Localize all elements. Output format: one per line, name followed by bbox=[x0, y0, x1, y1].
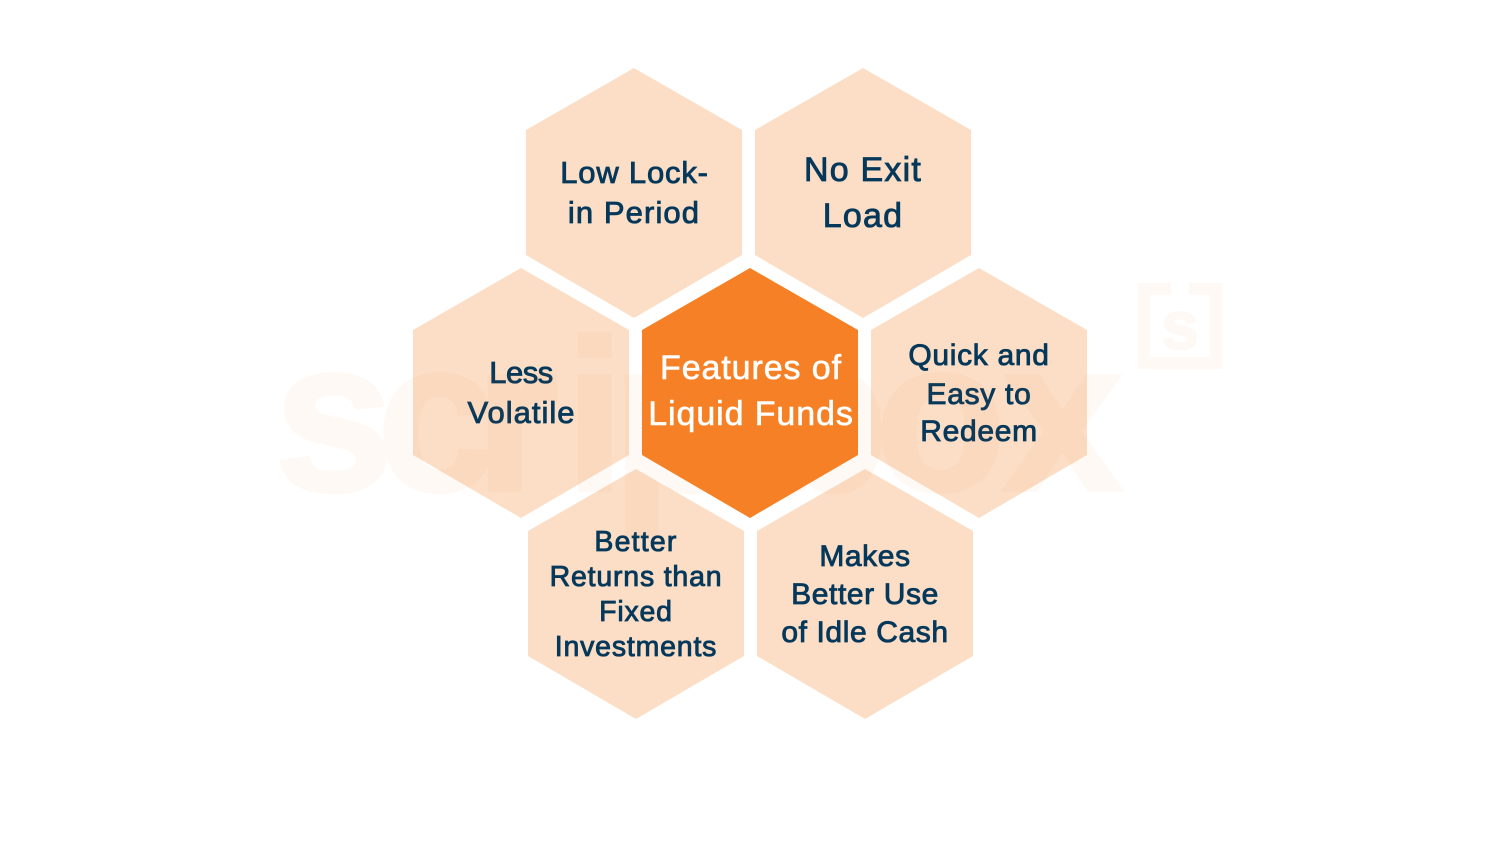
hexagon: center Features of Liquid Funds bbox=[642, 268, 858, 518]
hexagon: Quick and Easy to Redeem bbox=[871, 268, 1087, 518]
hexagon: Quick and Easy to Redeem: Redeem bbox=[920, 415, 1038, 448]
hexagon: Low Lock-in Period bbox=[526, 68, 742, 318]
hexagon: Low Lock-in Period: Low Lock- bbox=[560, 155, 709, 190]
hexagon: Better Returns than Fixed Investments: Returns than bbox=[550, 561, 722, 593]
watermark: scripbox logo: scripbox bbox=[274, 295, 1123, 536]
hexagon: Makes Better Use of Idle Cash bbox=[757, 469, 973, 719]
hexagon: No Exit Load: No Exit bbox=[804, 151, 922, 189]
hexagon: Quick and Easy to Redeem: Easy to bbox=[927, 378, 1031, 411]
hexagon: Low Lock-in Period: in Period bbox=[568, 195, 700, 230]
hexagon: Quick and Easy to Redeem: Quick and bbox=[908, 339, 1050, 372]
hexagon: Makes Better Use of Idle Cash: Better Use bbox=[791, 578, 939, 611]
hexagon: Less Volatile: Volatile bbox=[468, 395, 575, 430]
hexagon: Makes Better Use of Idle Cash: Makes bbox=[819, 540, 911, 573]
hexagon: Better Returns than Fixed Investments bbox=[528, 469, 744, 719]
hexagon: No Exit Load: Load bbox=[823, 197, 903, 235]
hexagon: Less Volatile bbox=[413, 268, 629, 518]
hexagon: No Exit Load bbox=[755, 68, 971, 318]
hexagon: Less Volatile: Less bbox=[489, 355, 553, 390]
hexagon: Better Returns than Fixed Investments: Investments bbox=[555, 631, 717, 663]
hexagon: Better Returns than Fixed Investments: Fixed bbox=[599, 596, 673, 628]
hexagon: Better Returns than Fixed Investments: Better bbox=[594, 526, 678, 558]
hexagon: center Features of Liquid Funds: Features of bbox=[660, 349, 842, 387]
watermark: scripbox logo: s bbox=[1161, 288, 1199, 364]
hexagon: Makes Better Use of Idle Cash: of Idle Cash bbox=[781, 616, 949, 649]
hexagon: center Features of Liquid Funds: Liquid Funds bbox=[648, 395, 854, 433]
